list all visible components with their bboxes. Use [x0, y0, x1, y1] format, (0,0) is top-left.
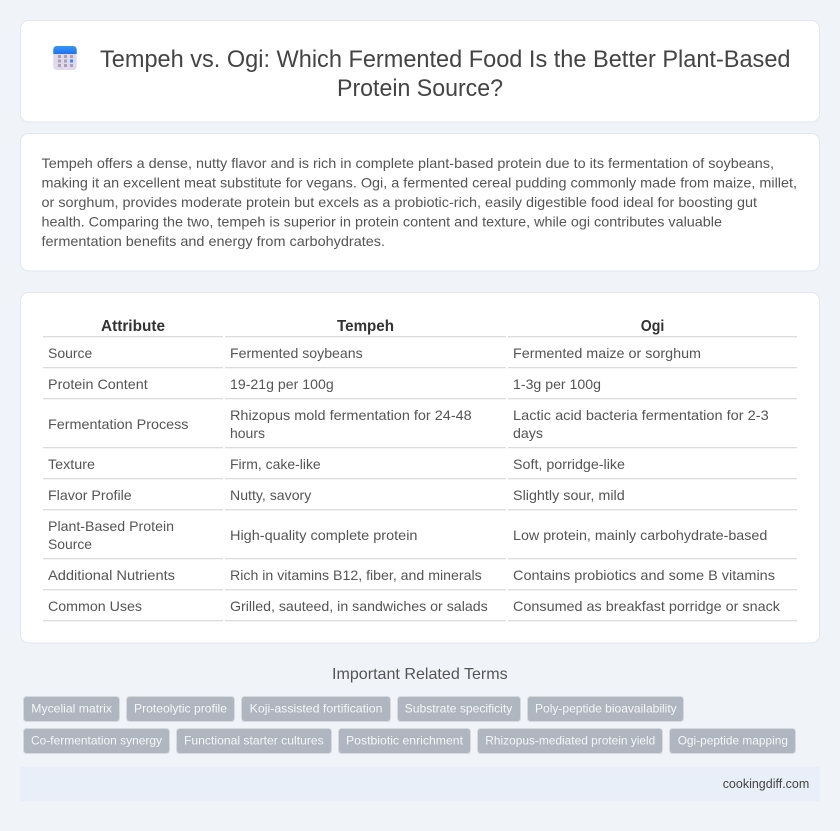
tag: ogi-peptide mapping: Ogi-peptide mapping [678, 734, 788, 748]
table header row: Ogi [641, 318, 664, 335]
row: source [43, 345, 797, 368]
row: fermentation process: hours [230, 425, 265, 441]
tag: substrate specificity: Substrate specificity [405, 702, 512, 716]
tag: ogi-peptide mapping [670, 728, 796, 754]
row: flavor profile: Nutty, savory [230, 487, 311, 503]
row: fermentation process: Lactic acid bacteria fermentation for 2-3 [513, 407, 769, 423]
panel: summary text: making it an excellent meat substitute for vegans. Ogi, a fermented cereal pudding commonly made from maize, millet, [42, 174, 797, 190]
row: flavor profile: Slightly sour, mild [513, 487, 625, 503]
row: common uses [43, 598, 797, 621]
title: Protein Source? [337, 75, 503, 102]
icon: calendar [53, 46, 77, 70]
tag: postbiotic enrichment: Postbiotic enrichment [346, 734, 464, 748]
row: texture: Texture [48, 456, 95, 472]
panel: summary text [20, 134, 820, 271]
title [100, 46, 790, 102]
table header row [43, 318, 797, 337]
tag: rhizopus-mediated protein yield: Rhizopus-mediated protein yield [485, 734, 655, 748]
tag: proteolytic profile: Proteolytic profile [134, 702, 227, 716]
row: additional nutrients: Rich in vitamins B12, fiber, and minerals [230, 567, 482, 583]
tag: substrate specificity [398, 696, 520, 722]
heading: important related terms: Important Related Terms [332, 666, 508, 683]
row: plant-based protein source: Plant-Based Protein [48, 518, 174, 534]
row: additional nutrients: Additional Nutrients [48, 567, 175, 583]
row: plant-based protein source: High-quality complete protein [230, 527, 418, 543]
tag: proteolytic profile [126, 696, 234, 722]
row: fermentation process: Rhizopus mold fermentation for 24-48 [230, 407, 472, 423]
row: flavor profile [43, 487, 797, 510]
tag: mycelial matrix [24, 696, 120, 722]
row: protein content: Protein Content [48, 376, 148, 392]
row: source: Fermented soybeans [230, 345, 363, 361]
tag: mycelial matrix: Mycelial matrix [31, 702, 112, 716]
row: plant-based protein source: Low protein, mainly carbohydrate-based [513, 527, 767, 543]
panel: summary text: fermentation benefits and energy from carbohydrates. [42, 233, 385, 249]
row: common uses: Grilled, sauteed, in sandwiches or salads [230, 598, 488, 614]
row: texture: Soft, porridge-like [513, 456, 625, 472]
tag: koji-assisted fortification: Koji-assisted fortification [250, 702, 382, 716]
title: Tempeh vs. Ogi: Which Fermented Food Is the Better Plant-Based [100, 46, 790, 73]
row: fermentation process [43, 407, 797, 448]
table header row: Attribute [101, 318, 165, 335]
panel: comparison table [20, 292, 820, 643]
tag: poly-peptide bioavailability: Poly-peptide bioavailability [535, 702, 677, 716]
row: common uses: Common Uses [48, 598, 142, 614]
panel: summary text: or sorghum, provides moderate protein but excels as a probiotic-rich, easily digestible food ideal for boosting gut [42, 194, 757, 210]
row: source: Source [48, 345, 93, 361]
row: fermentation process: days [513, 425, 543, 441]
row: common uses: Consumed as breakfast porridge or snack [513, 598, 781, 614]
tag: co-fermentation synergy: Co-fermentation synergy [31, 734, 162, 748]
tag: co-fermentation synergy [24, 728, 170, 754]
tag: postbiotic enrichment [338, 728, 470, 754]
tag: rhizopus-mediated protein yield [478, 728, 662, 754]
row: plant-based protein source: Source [48, 536, 92, 552]
row: protein content: 1-3g per 100g [513, 376, 601, 392]
tag: functional starter cultures: Functional starter cultures [184, 734, 324, 748]
row: additional nutrients: Contains probiotics and some B vitamins [513, 567, 775, 583]
row: plant-based protein source [43, 518, 797, 559]
row: texture [43, 456, 797, 479]
panel: summary text: health. Comparing the two, tempeh is superior in protein content and texture, while ogi contributes valuable [42, 214, 722, 230]
tag: poly-peptide bioavailability [528, 696, 684, 722]
table header row: Tempeh [337, 318, 394, 335]
tag: koji-assisted fortification [242, 696, 390, 722]
footer bar [20, 767, 820, 801]
panel: summary text: Tempeh offers a dense, nutty flavor and is rich in complete plant-based protein due to its fermentation of soybeans, [42, 155, 774, 171]
row: protein content [43, 376, 797, 399]
related term tags [24, 696, 796, 754]
row: source: Fermented maize or sorghum [513, 345, 701, 361]
footer bar: cookingdiff.com [723, 777, 809, 791]
row: flavor profile: Flavor Profile [48, 487, 132, 503]
panel: title header [20, 20, 820, 122]
row: additional nutrients [43, 567, 797, 590]
row: fermentation process: Fermentation Process [48, 416, 188, 432]
tag: functional starter cultures [176, 728, 332, 754]
row: protein content: 19-21g per 100g [230, 376, 334, 392]
row: texture: Firm, cake-like [230, 456, 321, 472]
